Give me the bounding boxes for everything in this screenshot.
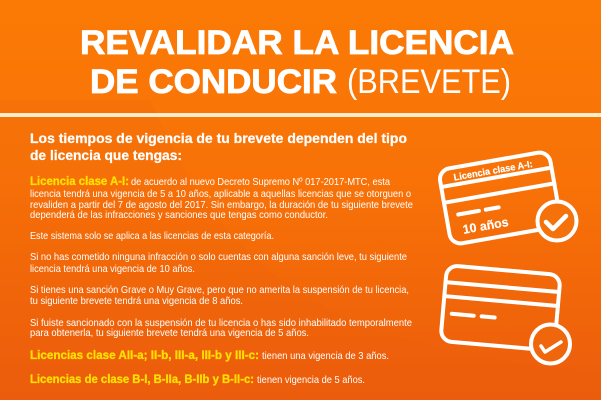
text block: licencias clase B [30,372,365,386]
text block: suspensión: para obtenerla, tu siguiente brevete tendrá una vigencia de 5 años. [30,328,309,339]
text block: sanción grave: Si tienes una sanción Grave o Muy Grave, pero que no amerita la suspensión de tu licencia, [30,285,409,296]
title divider [0,113,601,117]
heading [30,130,407,163]
text block: sin infracción [30,252,407,275]
text block: licencia clase A-I: de acuerdo al nuevo Decreto Supremo Nº 017-2017-MTC, esta [131,177,390,188]
text block: sistema: Este sistema solo se aplica a las licencias de esta categoría. [30,231,274,242]
text block: sanción grave: tu siguiente brevete tendrá una vigencia de 8 años. [30,296,243,307]
title [80,24,514,101]
title: DE CONDUCIR [90,63,337,101]
background curved shading [0,100,601,400]
heading: Los tiempos de vigencia de tu brevete dependen del tipo [30,130,407,146]
text block: sin infracción: licencia tendrá una vigencia de 10 años. [30,264,195,275]
icon: licence card with 10 años: Licencia clase A-I: [453,159,534,184]
icon: licence card with 10 años: 10 años [462,215,510,237]
text block: sanción grave [30,285,409,307]
text block: licencias clase A [30,348,389,362]
text block: licencias clase A: Licencias clase AII-a; II-b, III-a, III-b y III-c: [30,348,259,362]
icon: blank licence card [440,265,570,364]
text block: licencia clase A-I: dependerá de las infracciones y sanciones que tengas como conductor. [30,210,328,221]
text block: licencias clase B: tienen vigencia de 5 años. [257,375,365,386]
text block: suspensión: Si fuiste sancionado con la suspensión de tu licencia o has sido inhabilitado temporalmente [30,318,412,329]
title: REVALIDAR LA LICENCIA [80,24,514,62]
icon: licence card with 10 años [438,151,576,245]
text block: licencia clase A-I: Licencia clase A-I: [30,174,129,188]
text block: licencias clase A: tienen una vigencia de 3 años. [262,351,389,362]
text block: licencia clase A-I: revaliden a partir del 7 de agosto del 2017. Sin embargo, la duración de tu siguiente brevete [30,200,413,211]
text block: licencias clase B: Licencias de clase B-I, B-IIa, B-IIb y B-II-c: [30,372,254,386]
text block: suspensión [30,318,412,339]
text block: licencia clase A-I [30,174,413,221]
text block: licencia clase A-I: licencia tendrá una vigencia de 5 a 10 años, aplicable a aquellas licencias que se otorguen o [30,189,411,200]
title: (BREVETE) [347,63,511,101]
heading: de licencia que tengas: [30,147,182,163]
text block: sin infracción: Si no has cometido ninguna infracción o solo cuentas con alguna sanción leve, tu siguiente [30,252,407,263]
